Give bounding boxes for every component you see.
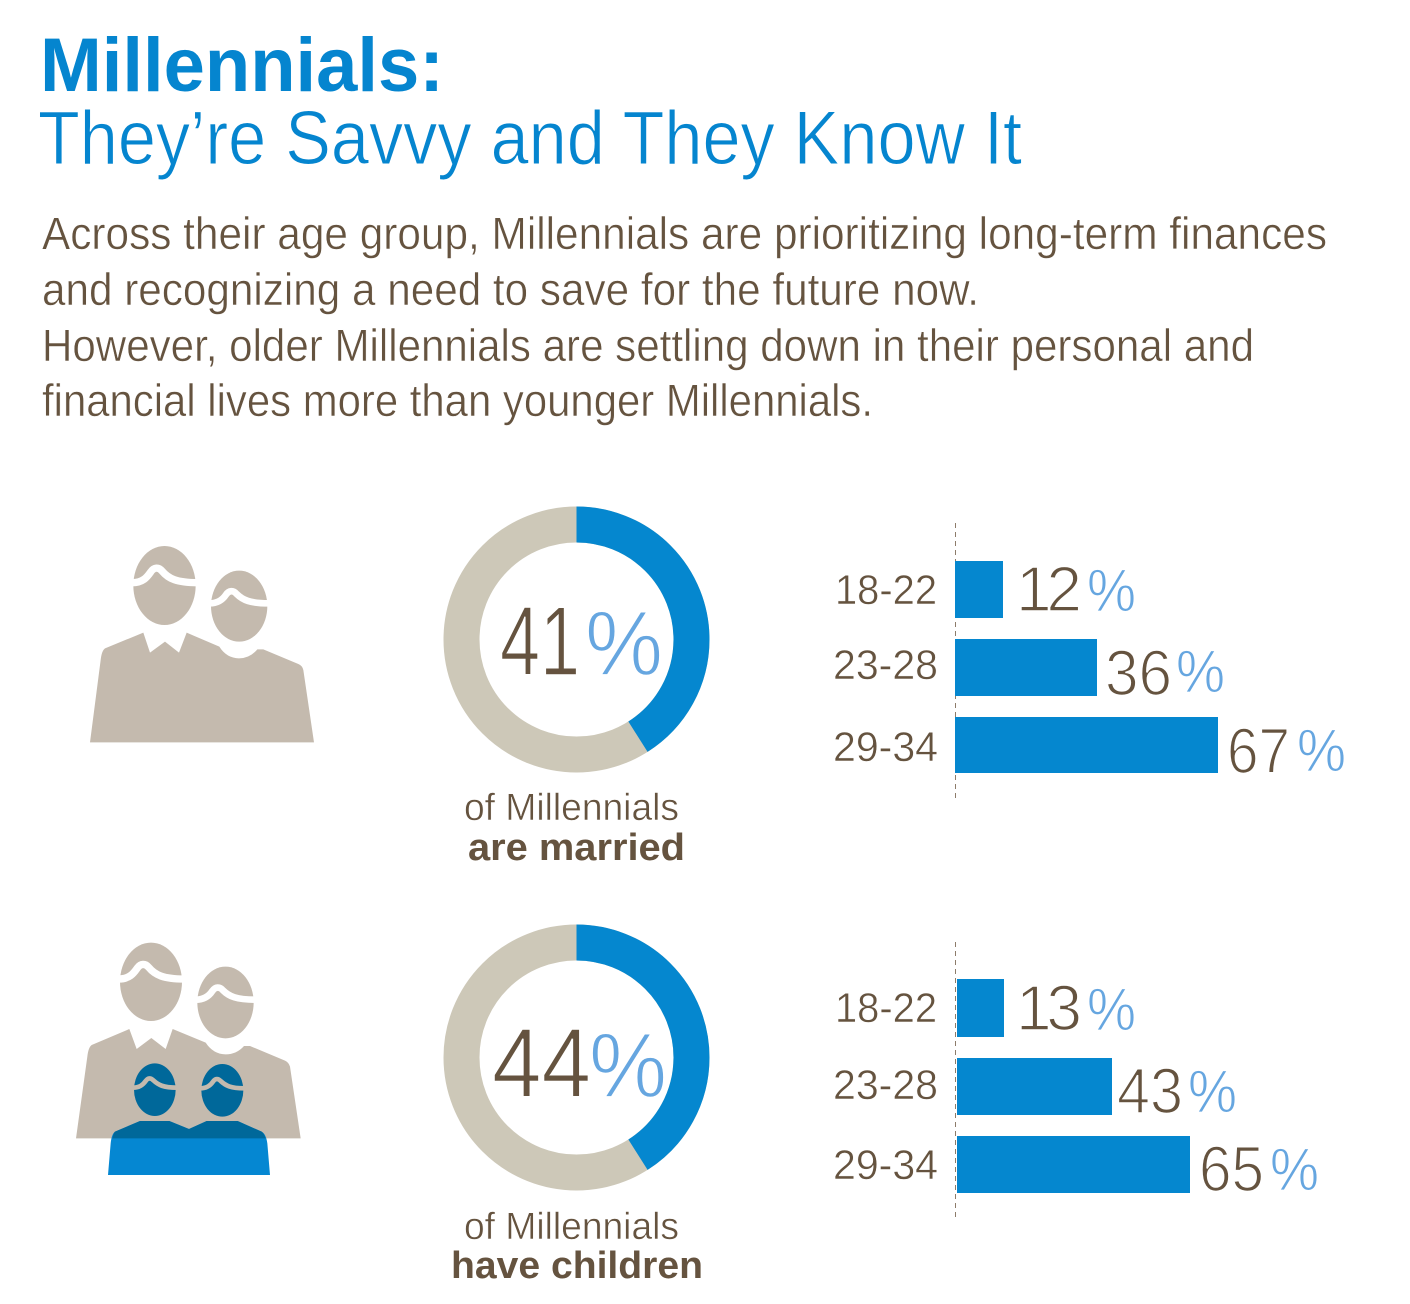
caption: have children: of Millennials (464, 1206, 679, 1248)
bar chart: married by age: % (1297, 717, 1346, 784)
bar chart: married by age: 67 (1227, 715, 1290, 787)
donut: 44% children (462, 942, 692, 1172)
bar chart: children by age: % (1188, 1058, 1237, 1125)
donut: 44% children: % (589, 1015, 667, 1117)
donut: 41% married: % (585, 593, 663, 695)
bar chart: children by age: 29-34 (833, 1141, 938, 1188)
intro text: Across their age group, Millennials are prioritizing long-term finances (42, 208, 1327, 259)
bar chart: married by age: 36 (1105, 637, 1172, 709)
bar chart: children by age: % (1087, 976, 1136, 1043)
caption: have children (451, 1206, 703, 1287)
bar chart: married by age: 29-34 (833, 723, 938, 770)
title (38, 23, 1022, 181)
caption: are married: of Millennials (464, 787, 679, 829)
bar chart: children by age: 65 (1199, 1133, 1264, 1205)
bar chart: married by age (833, 523, 1346, 802)
donut: 41% married (462, 524, 692, 754)
title: Millennials: (40, 23, 444, 108)
bar chart: children by age (833, 942, 1319, 1220)
bar chart: children by age: 18-22 (835, 984, 937, 1031)
bar chart: married by age: % (1087, 557, 1136, 624)
bar chart: married by age: 23-28 (833, 641, 938, 688)
donut: 44% children: 44 (492, 1008, 591, 1118)
caption: have children: have children (451, 1245, 703, 1287)
bar chart: married by age: % (1176, 638, 1225, 705)
title: They’re Savvy and They Know It (38, 96, 1022, 181)
bar chart: married by age: 18-22 (835, 566, 937, 613)
bar chart: children by age: % (1270, 1136, 1319, 1203)
intro text: However, older Millennials are settling down in their personal and (42, 320, 1254, 371)
bar chart: children by age: 23-28 (833, 1061, 938, 1108)
bar chart: children by age: 43 (1117, 1055, 1183, 1127)
icon: couple (90, 546, 314, 742)
intro text: and recognizing a need to save for the future now. (42, 264, 979, 315)
caption: are married: are married (468, 827, 685, 869)
intro text (42, 208, 1327, 426)
icon: family (76, 943, 301, 1175)
intro text: financial lives more than younger Millennials. (42, 375, 873, 426)
caption: are married (464, 787, 685, 869)
bar chart: married by age: 12 (1016, 553, 1082, 625)
donut: 41% married: 41 (500, 586, 580, 696)
bar chart: children by age: 13 (1016, 972, 1082, 1044)
